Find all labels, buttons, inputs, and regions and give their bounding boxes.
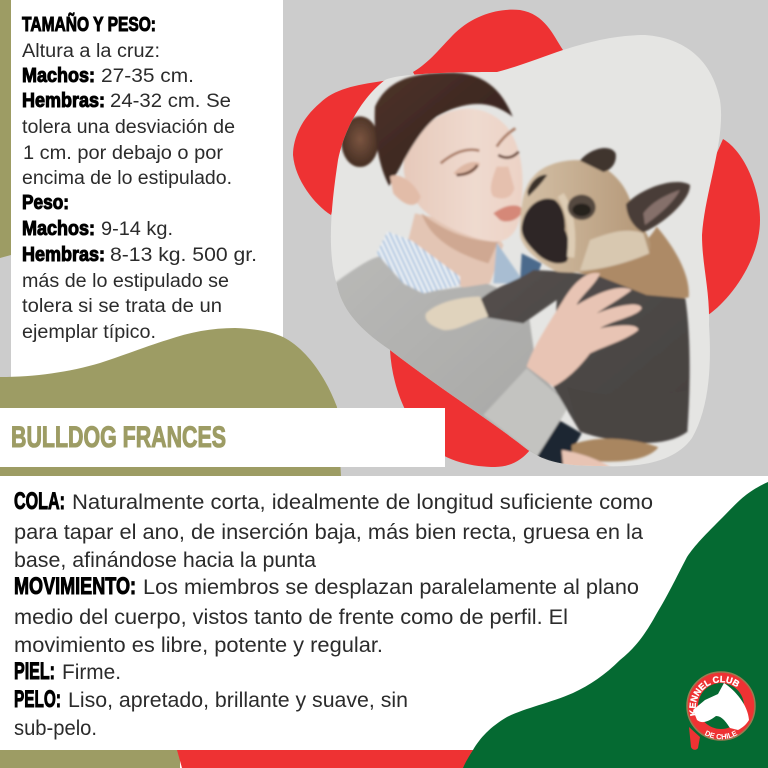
bottom stripe [0,750,480,768]
text block: breed description: sub-pelo. [14,717,97,740]
dog top ear [580,148,616,172]
woman eyes and brows [441,128,519,175]
text block: breed description: base, afinándose hacia la punta [14,549,316,572]
green wave [463,482,768,768]
dog face fold [561,195,572,257]
dog body fur [570,227,689,302]
text block: breed description: MOVIMIENTO: [14,573,136,600]
text block: tamaño y peso: 9-14 kg. [101,219,173,240]
dog lower fur [572,439,658,462]
text block: tamaño y peso: tolera si se trata de un [22,296,222,317]
light blob backdrop [331,35,721,466]
olive wave [0,328,341,476]
panel: size and weight [0,0,283,378]
dog neck highlight [580,231,649,271]
dog sweater ribbing [567,387,688,442]
title: BULLDOG FRANCES [11,421,226,454]
logo tie [689,727,700,750]
blue shirt inside [519,252,543,278]
woman hair bun [341,116,379,167]
neck shadow [422,213,498,263]
dog sweater [480,270,690,443]
text block: tamaño y peso: 8-13 kg. 500 gr. [110,245,257,266]
woman neck [408,213,503,287]
logo dog head [693,683,749,730]
photo: woman kissing french bulldog [330,73,690,473]
dog head [520,160,650,273]
dog eye [572,204,591,216]
woman nose shadow [491,167,514,199]
jeans [537,421,582,467]
title banner [0,408,445,467]
text block: tamaño y peso: encima de lo estipulado. [22,168,232,189]
red blobs behind photo [293,10,760,467]
text block: tamaño y peso: 27-35 cm. [101,66,194,87]
text block: tamaño y peso: Peso: [22,191,69,214]
text block: tamaño y peso: TAMAÑO Y PESO: [22,13,156,36]
dog right ear [626,182,690,232]
red blob: left [293,80,390,215]
woman hand [527,273,642,387]
text block: tamaño y peso: tolera una desviación de [22,117,235,138]
woman eye shadow [453,162,480,176]
shirt collar [377,232,460,293]
text block: breed description: medio del cuerpo, vistos tanto de frente como de perfil. El [14,606,568,629]
text block: tamaño y peso: más de lo estipulado se [22,271,229,292]
dog forehead mark [527,175,547,197]
text block: breed description: Firme. [62,661,121,684]
woman sleeve [483,368,569,458]
text block: breed description: COLA: [14,488,65,515]
text block: tamaño y peso: ejemplar típico. [22,322,156,343]
woman sweater [336,256,558,458]
text block: tamaño y peso [22,13,257,343]
red blob: bottom [390,350,530,467]
logo: Kennel Club de Chile [686,671,756,750]
logo bottom text: DE CHILE [704,730,738,740]
text block: tamaño y peso: Altura a la cruz: [22,41,160,62]
dog paw [426,297,488,330]
text block: tamaño y peso: 24-32 cm. Se [110,91,231,112]
text block: breed description [14,488,653,740]
text block: breed description: PIEL: [14,658,55,685]
text block: breed description: para tapar el ano, de inserción baja, más bien recta, gruesa en la [14,521,643,544]
text block: breed description: PELO: [14,686,61,713]
text block: tamaño y peso: Hembras: [22,89,105,112]
text block: breed description: Naturalmente corta, idealmente de longitud suficiente como [72,491,653,514]
text block: tamaño y peso: Machos: [22,64,95,87]
text block: breed description: Liso, apretado, brillante y suave, sin [68,689,408,712]
text block: tamaño y peso: Machos: [22,217,95,240]
woman hair [375,73,513,186]
text block: tamaño y peso: 1 cm. por debajo o por [23,143,224,164]
panel: lower description [0,476,768,768]
text block: breed description: movimiento es libre, potente y regular. [14,634,383,657]
dog eye patch [568,195,596,220]
dog muzzle [522,199,569,263]
text block: tamaño y peso: Hembras: [22,243,105,266]
woman lower hand [562,450,611,467]
woman lips [493,205,523,222]
red blob: right [695,139,760,315]
text block: breed description: Los miembros se desplazan paralelamente al plano [143,576,639,599]
woman ear [390,175,421,205]
logo top text: KENNEL CLUB [689,676,740,716]
woman face [404,109,523,242]
red blob: top [413,10,563,85]
